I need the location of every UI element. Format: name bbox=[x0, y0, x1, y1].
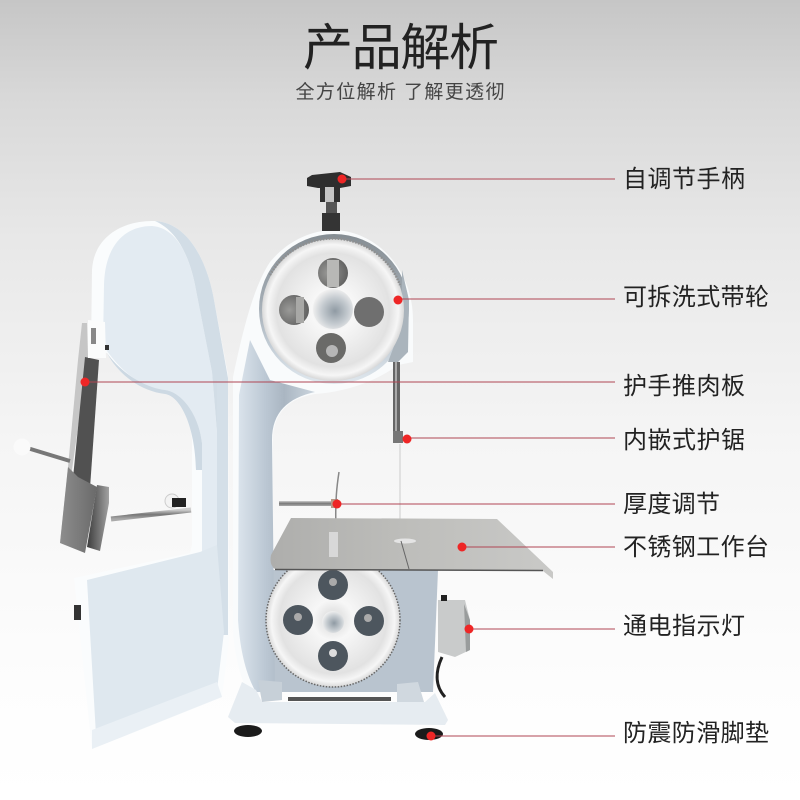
callout: 厚度调节 bbox=[332, 491, 720, 518]
callout: 内嵌式护锯 bbox=[402, 427, 745, 454]
upper pulley recess bbox=[259, 234, 409, 384]
upper pulley wheel bbox=[262, 238, 404, 381]
meat pusher guard plate bbox=[14, 320, 109, 553]
callout: 通电指示灯 bbox=[464, 613, 745, 640]
callout: 自调节手柄 bbox=[338, 166, 745, 193]
pusher ball handle bbox=[24, 447, 70, 461]
callout: 不锈钢工作台: 不锈钢工作台 bbox=[623, 534, 769, 561]
title: 产品解析 bbox=[303, 20, 499, 76]
lower door rod bbox=[111, 494, 191, 519]
callout: 可拆洗式带轮 bbox=[394, 284, 769, 311]
callout: 可拆洗式带轮: 可拆洗式带轮 bbox=[623, 284, 769, 311]
base and slot bbox=[228, 680, 448, 725]
anti-slip feet bbox=[234, 725, 443, 740]
indicator switch box bbox=[437, 595, 470, 697]
callout: 护手推肉板: 护手推肉板 bbox=[623, 373, 745, 400]
callout: 自调节手柄: 自调节手柄 bbox=[623, 166, 745, 193]
callout: 通电指示灯: 通电指示灯 bbox=[623, 613, 745, 640]
door panel bbox=[74, 221, 229, 749]
callout: 防震防滑脚垫: 防震防滑脚垫 bbox=[623, 720, 769, 747]
stainless steel worktable bbox=[270, 518, 553, 579]
frame column and pulley housing bbox=[233, 230, 438, 700]
callout: 护手推肉板 bbox=[80, 373, 745, 400]
door upper inner panel bbox=[103, 226, 221, 640]
lower pulley wheel bbox=[266, 553, 400, 687]
thickness adjustment rod bbox=[279, 472, 339, 530]
adjusting knob with spring bbox=[307, 172, 351, 231]
door lower inner panel bbox=[87, 545, 224, 735]
illustration: band saw machine bbox=[14, 172, 553, 749]
saw blade guard post bbox=[393, 362, 403, 540]
callout: 厚度调节: 厚度调节 bbox=[623, 491, 720, 518]
subtitle: 全方位解析 了解更透彻 bbox=[296, 81, 504, 103]
box behind lower wheel bbox=[268, 570, 438, 692]
door latch bbox=[74, 605, 81, 620]
callout: 防震防滑脚垫 bbox=[426, 720, 769, 747]
callout: 内嵌式护锯: 内嵌式护锯 bbox=[623, 427, 745, 454]
callout: 不锈钢工作台 bbox=[458, 534, 769, 561]
